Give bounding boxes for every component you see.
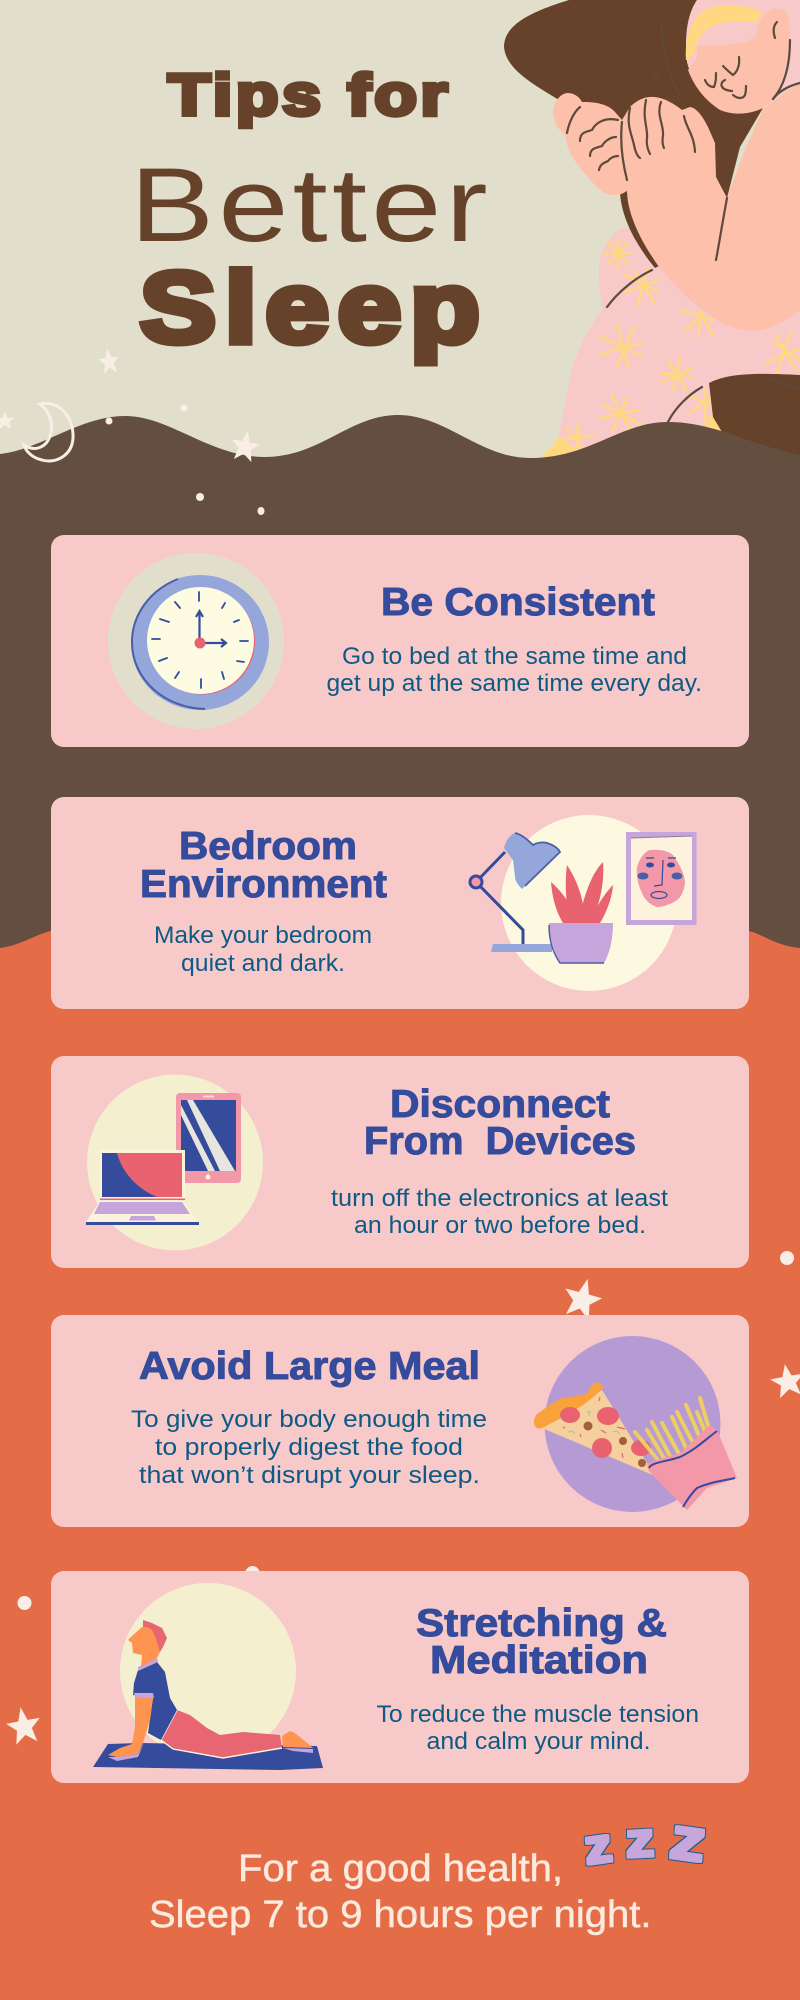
title: Tips for: [168, 62, 448, 128]
decorations: stars and dots upper: [0, 347, 264, 515]
icon: lamp, plant and portrait: [470, 815, 696, 991]
heading: From Devices: [364, 1120, 636, 1163]
text block: [376, 1701, 699, 1755]
title: Sleep: [140, 252, 480, 363]
icon: zzz: Z: [626, 1824, 654, 1865]
text block: To reduce the muscle tension: [376, 1701, 699, 1728]
title: Better: [130, 146, 488, 264]
text block: [331, 1185, 668, 1239]
title: [130, 62, 488, 363]
heading: Environment: [140, 863, 387, 906]
text block: Make your bedroom: [154, 922, 372, 949]
panel: stretching and meditation: [51, 1571, 749, 1783]
decorations: stars and dots lower: [4, 1251, 800, 1746]
heading: Meditation: [430, 1639, 648, 1682]
text block: turn off the electronics at least: [331, 1185, 668, 1212]
icon: zzz: Z: [668, 1818, 707, 1871]
heading: [416, 1602, 667, 1682]
icon: zzz: Z: [583, 1829, 614, 1872]
closing message: Sleep 7 to 9 hours per night.: [149, 1894, 652, 1936]
background: dark brown wave band: [0, 415, 800, 948]
heading: Stretching &: [416, 1602, 667, 1645]
text block: to properly digest the food: [155, 1434, 463, 1461]
panel: be consistent: [51, 535, 749, 747]
icon: person in yoga pose: [93, 1583, 323, 1770]
icon: clock: [108, 553, 284, 729]
text block: that won’t disrupt your sleep.: [139, 1462, 480, 1489]
closing message: For a good health,: [238, 1848, 563, 1890]
text block: [326, 643, 702, 697]
text block: quiet and dark.: [181, 950, 345, 977]
text block: To give your body enough time: [131, 1406, 487, 1433]
heading: [140, 825, 387, 906]
text block: and calm your mind.: [426, 1728, 650, 1755]
text block: Go to bed at the same time and: [342, 643, 687, 670]
icon: crescent moon: [24, 403, 73, 461]
heading: Disconnect: [390, 1083, 610, 1126]
icon: laptop and tablet: [86, 1074, 263, 1250]
panel: disconnect from devices: [51, 1056, 749, 1268]
icon: zzz: [583, 1818, 707, 1872]
text block: [154, 922, 372, 977]
text block: an hour or two before bed.: [354, 1212, 646, 1239]
heading: [364, 1083, 636, 1163]
text block: [131, 1406, 487, 1489]
heading: Bedroom: [179, 825, 357, 868]
text block: get up at the same time every day.: [326, 670, 702, 697]
background: orange lower section: [0, 900, 800, 2000]
panel: bedroom environment: [51, 797, 749, 1009]
panel: avoid large meal: [51, 1315, 749, 1527]
icon: pizza and fries: [534, 1336, 737, 1512]
heading: Avoid Large Meal: [139, 1345, 480, 1388]
illustration: sleeping woman: [504, 0, 800, 470]
closing message: [149, 1848, 652, 1936]
background: cream top: [0, 0, 800, 560]
heading: Be Consistent: [381, 581, 655, 624]
